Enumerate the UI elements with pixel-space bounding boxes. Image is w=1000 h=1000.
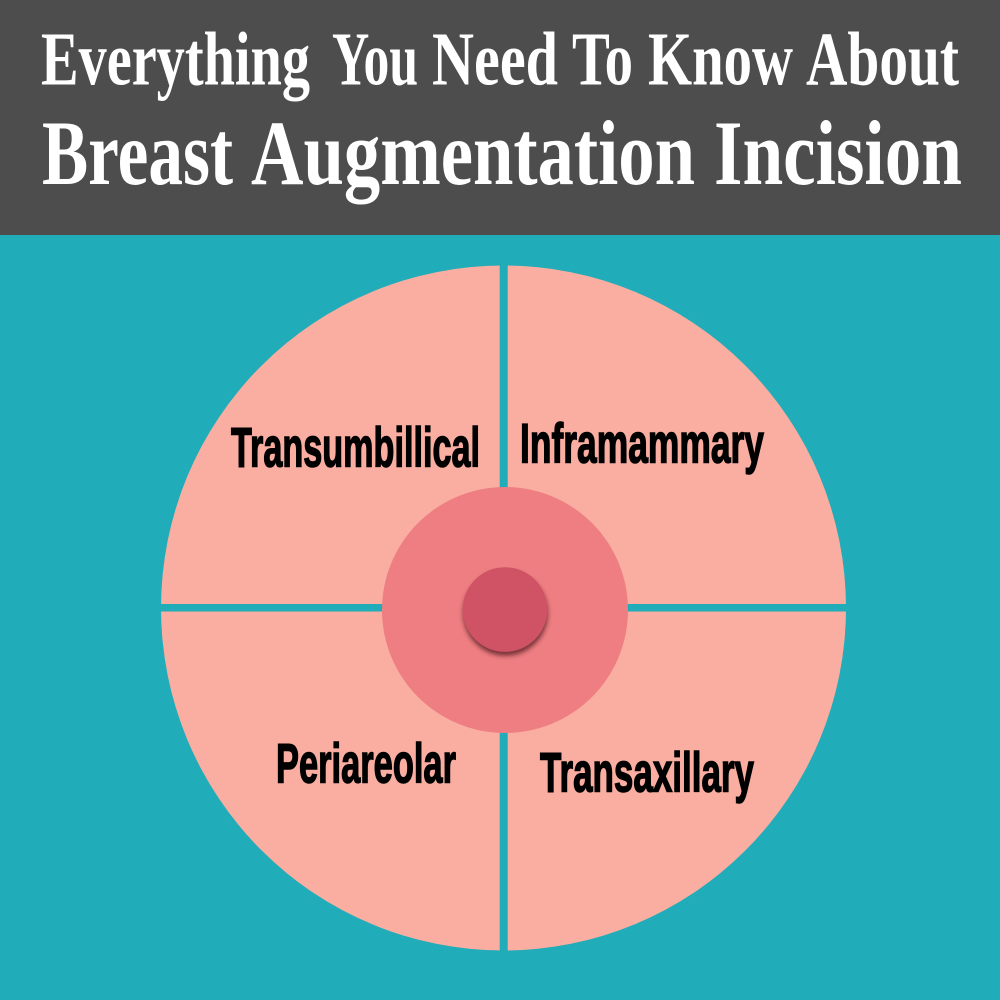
title line 2: Augmentation	[251, 102, 695, 204]
vertical divider	[500, 260, 508, 955]
areola circle	[382, 487, 628, 733]
panel: quadrants disc	[161, 266, 846, 950]
title line 1	[41, 18, 959, 102]
header band with title	[0, 0, 1000, 235]
label: Transumbillical: Transumbillical	[231, 416, 480, 478]
title line 2	[42, 102, 962, 204]
label: Transaxillary: Transaxillary	[540, 740, 754, 804]
title line 1: Need	[432, 18, 558, 102]
label: Inframammary: Inframammary	[520, 412, 764, 474]
title line 1: Know	[648, 18, 793, 102]
label: Periareolar: Periareolar	[276, 732, 456, 794]
title line 1: Everything	[41, 18, 310, 102]
title line 1: You	[332, 18, 418, 102]
center circle	[463, 567, 547, 652]
title line 1: To	[572, 18, 633, 102]
quadrant circle diagram	[155, 260, 855, 955]
title line 2: Breast	[42, 102, 233, 204]
horizontal divider	[155, 604, 855, 612]
